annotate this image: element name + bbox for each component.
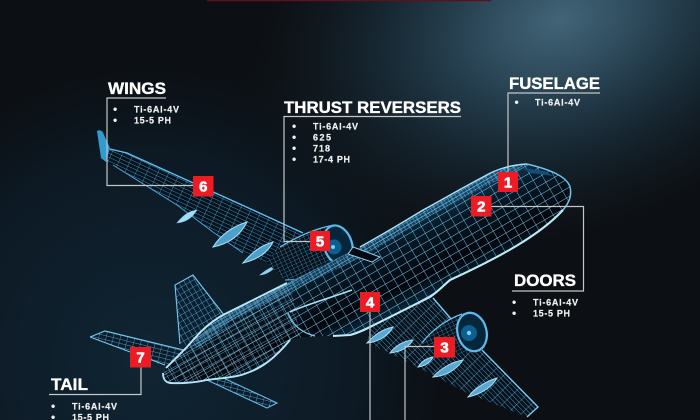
heading: tail: TAIL [51, 375, 88, 394]
badge 6: 6 [199, 178, 207, 196]
list: wings alloys: Ti-6Al-4V [134, 104, 179, 114]
badge 1: 1 [504, 174, 512, 192]
bright edges [360, 164, 527, 247]
list: tail alloys: Ti-6Al-4V [72, 402, 117, 412]
leader line: 3 [405, 346, 435, 420]
heading: thrust reversers: THRUST REVERSERS [284, 98, 461, 117]
leader line: fuselage [508, 93, 600, 172]
callout: fuselage [498, 74, 600, 192]
list: tail alloys [51, 399, 117, 420]
leader line: 4 [369, 312, 371, 420]
list: thrust reversers alloys: • [292, 130, 296, 144]
far wing [97, 130, 352, 300]
heading: doors: DOORS [514, 271, 576, 290]
list: doors alloys: 15-5 PH [533, 308, 570, 318]
list: thrust reversers alloys [292, 119, 358, 166]
list: tail alloys: • [51, 399, 55, 413]
fuselage [150, 160, 571, 390]
callout: wings [107, 79, 214, 196]
list: thrust reversers alloys: • [292, 152, 296, 166]
leader line: doors [491, 206, 584, 291]
wing root fairing [348, 247, 380, 262]
tail cone mesh [150, 160, 527, 390]
cockpit windows [522, 168, 553, 176]
list: wings alloys [113, 102, 179, 127]
badge 4: 4 [366, 294, 375, 312]
horizontal stabilizer, left [90, 331, 192, 366]
top red bar [207, 0, 491, 1]
list: thrust reversers alloys: 625 [313, 132, 331, 142]
engine, far side [266, 222, 357, 280]
callout: doors [471, 196, 584, 320]
list: doors alloys: • [512, 295, 516, 309]
list: wings alloys: • [113, 113, 117, 127]
list: doors alloys: Ti-6Al-4V [533, 298, 578, 308]
callout: tail [49, 347, 151, 420]
leader line: wings [107, 98, 194, 186]
airplane wireframe [90, 130, 571, 417]
callout: 3 [405, 337, 455, 420]
badge 2: 2 [477, 198, 485, 216]
list: thrust reversers alloys: • [292, 119, 296, 133]
list: wings alloys: • [113, 102, 117, 116]
engine, near side [422, 309, 491, 358]
callout: 4 [360, 292, 380, 420]
badge 7: 7 [136, 350, 145, 366]
list: fuselage alloys: Ti-6Al-4V [535, 98, 580, 108]
list: doors alloys [512, 295, 578, 320]
leader line: thrust reversers [284, 116, 461, 242]
list: fuselage alloys: • [514, 95, 519, 109]
badge 3: 3 [440, 340, 449, 356]
vertical stabilizer [175, 275, 224, 346]
badge 5: 5 [316, 234, 324, 250]
leader line: tail [49, 367, 141, 394]
list: wings alloys: 15-5 PH [134, 116, 171, 126]
list: thrust reversers alloys: Ti-6Al-4V [313, 122, 358, 132]
list: thrust reversers alloys: 17-4 PH [313, 154, 350, 164]
winglet [97, 130, 110, 162]
heading: fuselage: FUSELAGE [509, 74, 600, 93]
badge 5 [310, 231, 330, 251]
callout: thrust reversers [284, 98, 461, 251]
horizontal stabilizer, right [207, 375, 277, 408]
list: fuselage alloys [514, 95, 580, 109]
list: thrust reversers alloys: • [292, 141, 296, 155]
crown band [190, 160, 527, 348]
list: doors alloys: • [512, 306, 516, 320]
list: thrust reversers alloys: 718 [313, 144, 330, 154]
near wing [367, 298, 538, 417]
heading: wings: WINGS [108, 79, 166, 98]
